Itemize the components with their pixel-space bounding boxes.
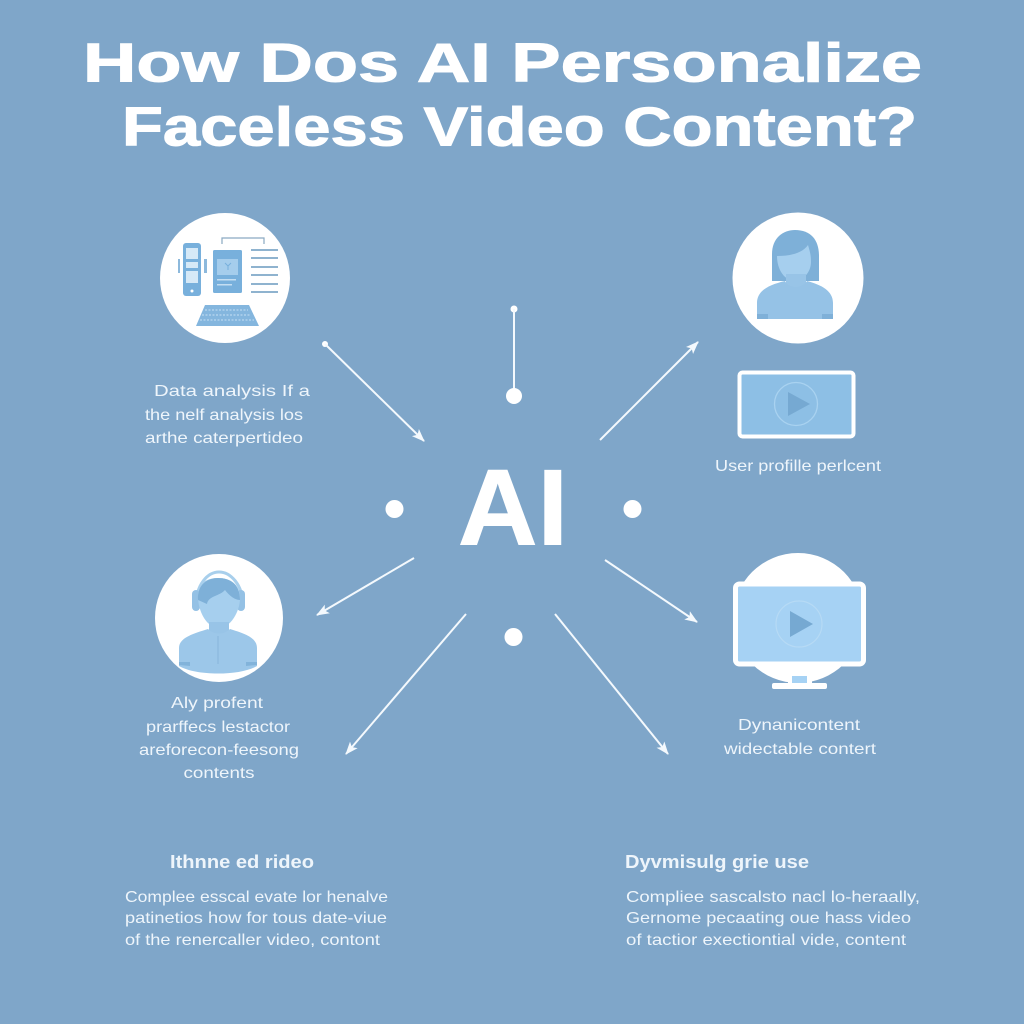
title [83, 32, 922, 158]
node: bottom [504, 628, 522, 646]
icon: video frame with play button [740, 372, 854, 436]
body: left: patinetios how for tous date-viue [125, 910, 387, 927]
arrow: mid-right [605, 560, 697, 622]
body: left [125, 889, 388, 949]
arrow: bottom-left [346, 614, 466, 754]
text: profile preferences: Aly profent [171, 695, 264, 712]
icon: user profile in circle [732, 212, 864, 344]
panel: bottom right text [625, 852, 920, 949]
icon: monitor with play button [733, 553, 864, 689]
text: profile preferences [139, 695, 299, 782]
heading: right: Dyvmisulg grie use [625, 852, 809, 872]
body: left: Complee esscal evate lor henalve [125, 889, 388, 906]
text: data analysis: the nelf analysis los [145, 407, 303, 424]
connector: top [506, 306, 522, 404]
arrow: top-right [600, 342, 698, 440]
text: data analysis [145, 383, 310, 447]
node: left [386, 500, 404, 518]
text: dynamic content [723, 717, 877, 758]
arrow: mid-left [317, 558, 414, 615]
text: dynamic content: widectable contert [723, 741, 877, 758]
panel: bottom left text [125, 852, 388, 949]
icon: devices in circle [160, 213, 290, 343]
arrow: bottom-right [555, 614, 668, 754]
text: data analysis: arthe caterpertideo [145, 430, 303, 447]
AI center label: AI [458, 446, 568, 568]
body: right [626, 889, 920, 949]
text: dynamic content: Dynanicontent [738, 717, 861, 734]
text: user profile: User profille perlcent [715, 458, 882, 475]
arrow: top-left [322, 341, 424, 441]
body: right: Compliee sascalsto nacl lo-heraally, [626, 889, 920, 906]
body: right: Gernome pecaating oue hass video [626, 910, 911, 927]
body: right: of tactior exectiontial vide, content [626, 932, 907, 949]
title: How Dos AI Personalize [83, 32, 922, 94]
body: left: of the renercaller video, contont [125, 932, 381, 949]
title: Faceless Video Content? [122, 96, 917, 158]
heading: left: Ithnne ed rideo [170, 852, 314, 872]
text: profile preferences: areforecon-feesong [139, 742, 299, 759]
icon: person with headphones in circle [155, 554, 283, 682]
node: right [624, 500, 642, 518]
text: profile preferences: prarffecs lestactor [146, 719, 291, 736]
text: profile preferences: contents [184, 765, 254, 782]
text: data analysis: Data analysis If a [154, 383, 310, 400]
